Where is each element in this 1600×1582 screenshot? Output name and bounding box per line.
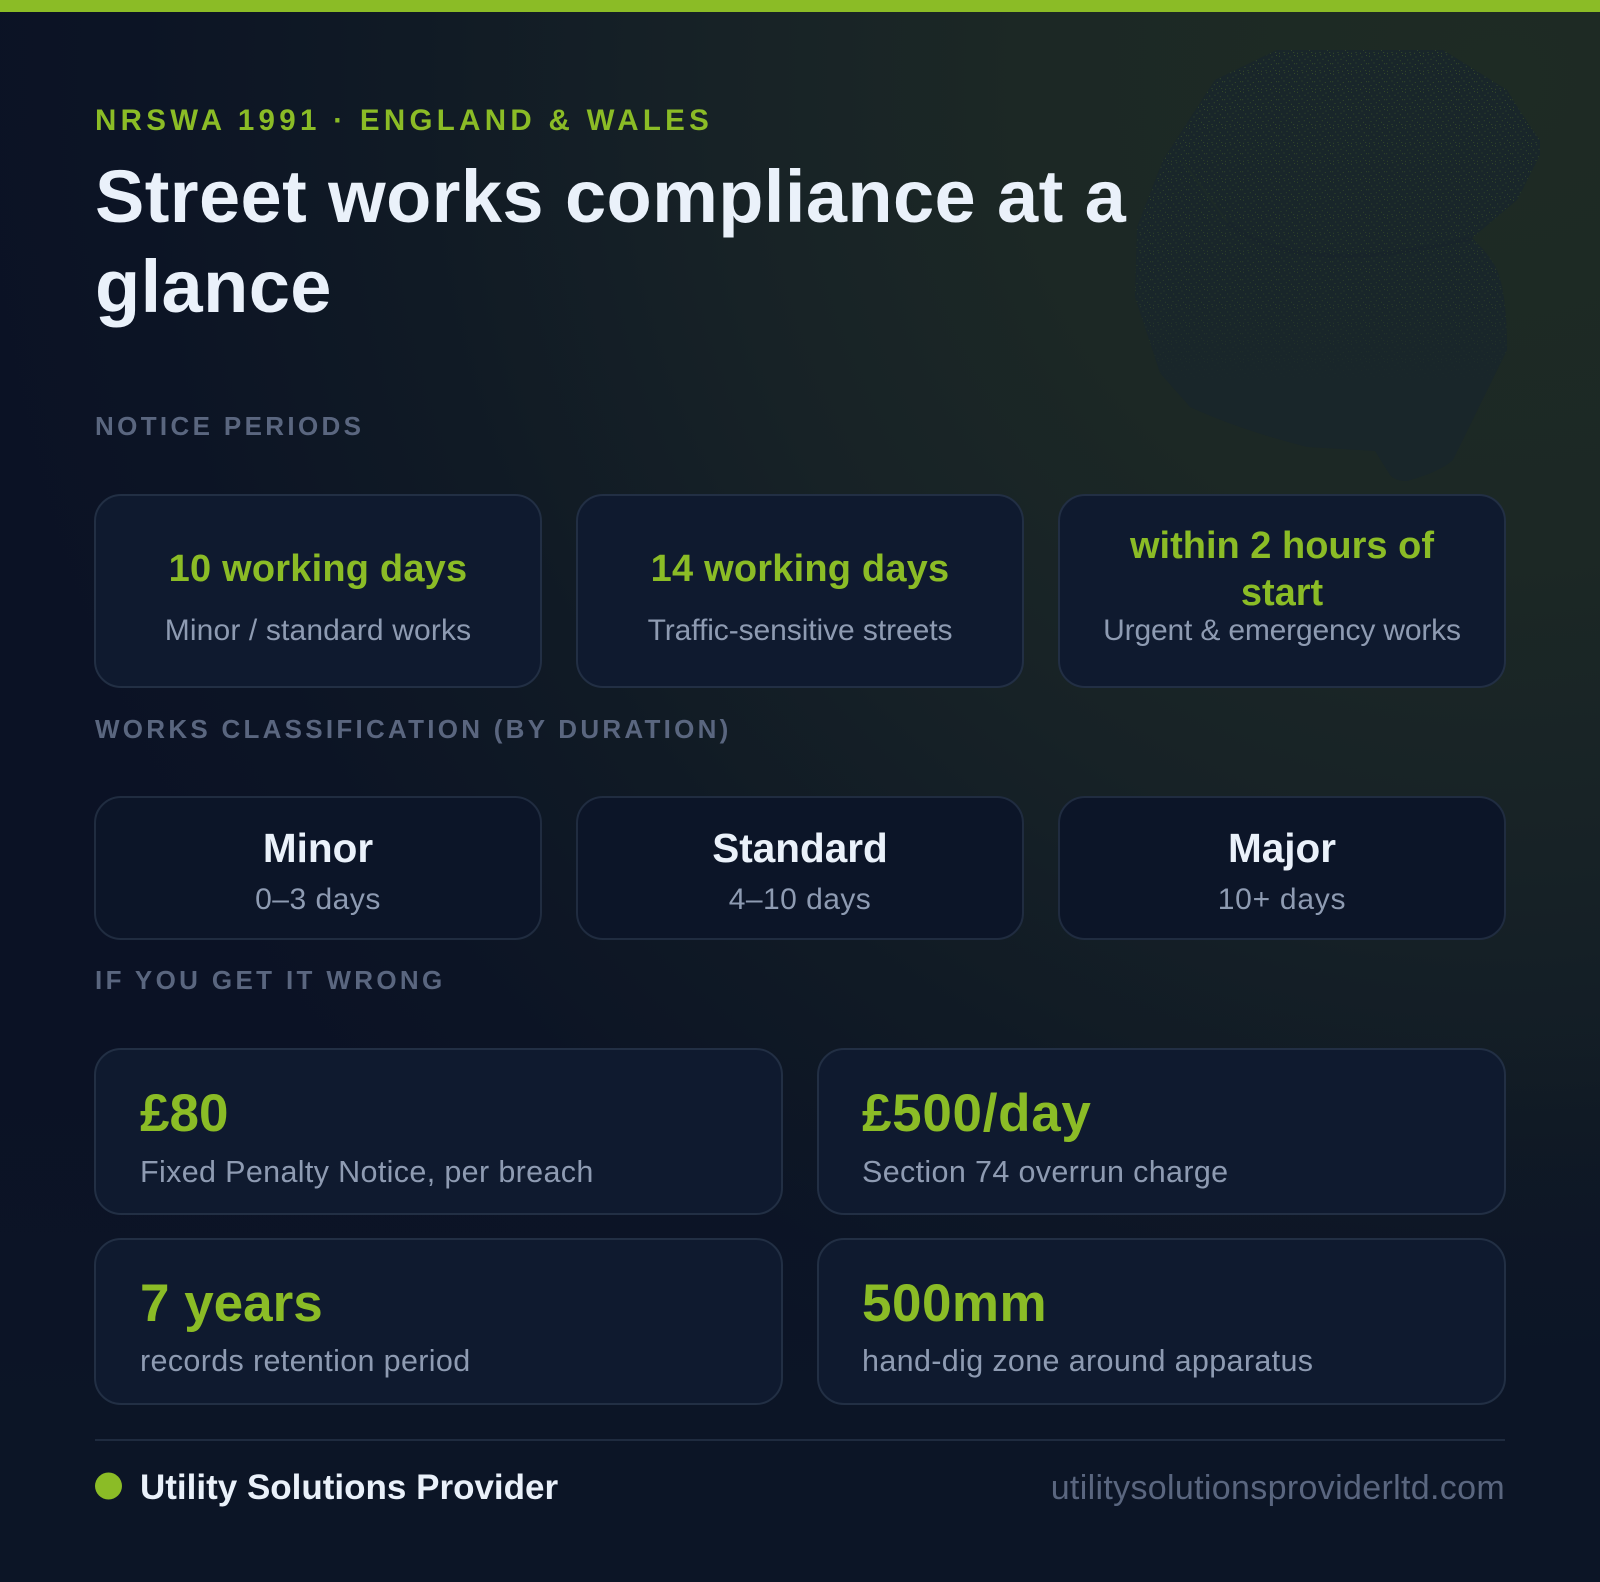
panel: penalties (95, 1049, 1505, 1404)
card: 14 working days: Traffic-sensitive streets (648, 614, 952, 647)
panel: notice periods (95, 495, 1505, 687)
card: 14 working days (577, 495, 1023, 687)
card: 500mm (818, 1239, 1505, 1404)
card: 10 working days: 10 working days (169, 548, 467, 590)
title (95, 155, 1127, 328)
top accent bar (0, 0, 1600, 12)
card: 7 years (95, 1239, 782, 1404)
background bottom fade (0, 1050, 1600, 1582)
card: £80: Fixed Penalty Notice, per breach (140, 1155, 594, 1189)
title: glance (95, 245, 332, 328)
heading: works classification: WORKS CLASSIFICATION (BY DURATION) (95, 714, 732, 744)
heading: notice periods: NOTICE PERIODS (95, 411, 364, 441)
card: minor: Minor (263, 825, 373, 871)
card: standard (577, 797, 1023, 939)
card: major: Major (1228, 825, 1336, 871)
card: 10 working days: Minor / standard works (165, 614, 471, 647)
panel: works classification (95, 797, 1505, 939)
card: 10 working days (95, 495, 541, 687)
card: within 2 hours of start (1059, 495, 1505, 687)
card: £500/day: £500/day (862, 1084, 1092, 1143)
card: 7 years: 7 years (140, 1274, 323, 1333)
card: £80 (95, 1049, 782, 1214)
card: minor (95, 797, 541, 939)
heading: if you get it wrong: IF YOU GET IT WRONG (95, 965, 446, 995)
card: standard: Standard (712, 825, 888, 871)
card: major: 10+ days (1218, 883, 1346, 916)
card: standard: 4–10 days (729, 883, 871, 916)
card: within 2 hours of start: start (1241, 572, 1324, 614)
brand name: Utility Solutions Provider (140, 1468, 558, 1507)
card: minor: 0–3 days (255, 883, 381, 916)
card: within 2 hours of start: Urgent & emergency works (1103, 614, 1461, 647)
title: Street works compliance at a (95, 155, 1127, 238)
card: major (1059, 797, 1505, 939)
website: utilitysolutionsproviderltd.com (1051, 1469, 1505, 1507)
card: £500/day: Section 74 overrun charge (862, 1155, 1228, 1189)
card: 500mm: 500mm (862, 1274, 1047, 1333)
card: 7 years: records retention period (140, 1344, 471, 1378)
eyebrow: NRSWA 1991 · ENGLAND & WALES (95, 104, 713, 137)
card: £80: £80 (140, 1084, 228, 1143)
card: 14 working days: 14 working days (651, 548, 949, 590)
footer (95, 1468, 1505, 1507)
card: £500/day (818, 1049, 1505, 1214)
card: 500mm: hand-dig zone around apparatus (862, 1344, 1313, 1378)
icon: brand dot (95, 1472, 122, 1500)
card: within 2 hours of start: within 2 hours of (1129, 525, 1434, 567)
icon: dotted blob watermark (1135, 50, 1540, 361)
